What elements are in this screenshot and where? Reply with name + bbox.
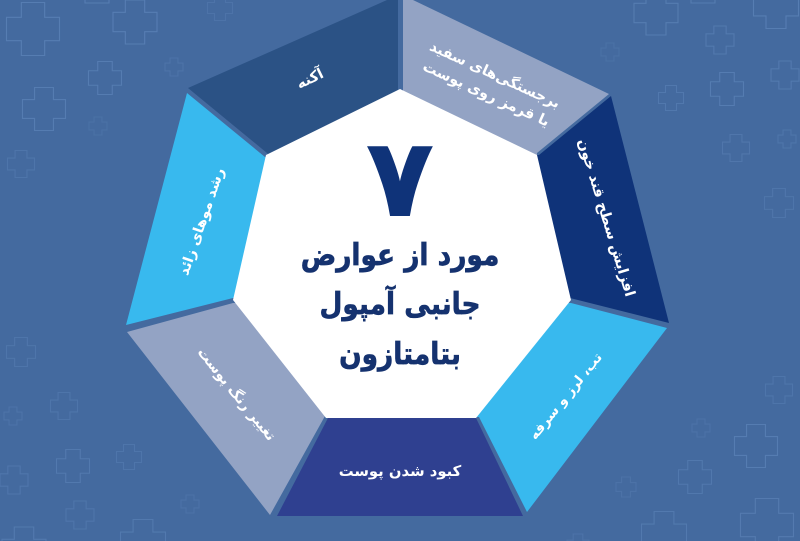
center heptagon xyxy=(233,89,571,418)
segment: skin discoloration xyxy=(127,303,330,515)
label: skin discoloration: تغییر رنگ پوست xyxy=(194,344,280,444)
title: مورد از عوارض xyxy=(301,237,499,272)
segment: white or red skin bumps xyxy=(403,0,609,157)
label: excess hair growth: رشد موهای زائد xyxy=(176,166,228,278)
label: raised blood sugar: افزایش سطح قند خون xyxy=(574,137,637,299)
segment: skin bruising xyxy=(277,418,523,516)
title xyxy=(301,237,499,371)
segment: raised blood sugar xyxy=(534,96,669,323)
label: skin bruising: کبود شدن پوست xyxy=(339,463,462,480)
label: skin bumps: یا قرمز روی پوست xyxy=(420,59,552,130)
segment: acne xyxy=(188,0,398,156)
label: fever, chills and cough: تب، لرز و سرفه xyxy=(526,350,606,443)
segment: excess hair growth xyxy=(126,93,270,325)
segment: fever, chills and cough xyxy=(474,303,667,512)
numeral seven: ۷ xyxy=(365,115,435,243)
label: acne: آکنه xyxy=(293,64,327,93)
label: skin bumps: برجستگی‌های سفید xyxy=(427,37,563,112)
title: جانبی آمپول xyxy=(319,285,481,321)
title: بتامتازون xyxy=(339,336,461,371)
